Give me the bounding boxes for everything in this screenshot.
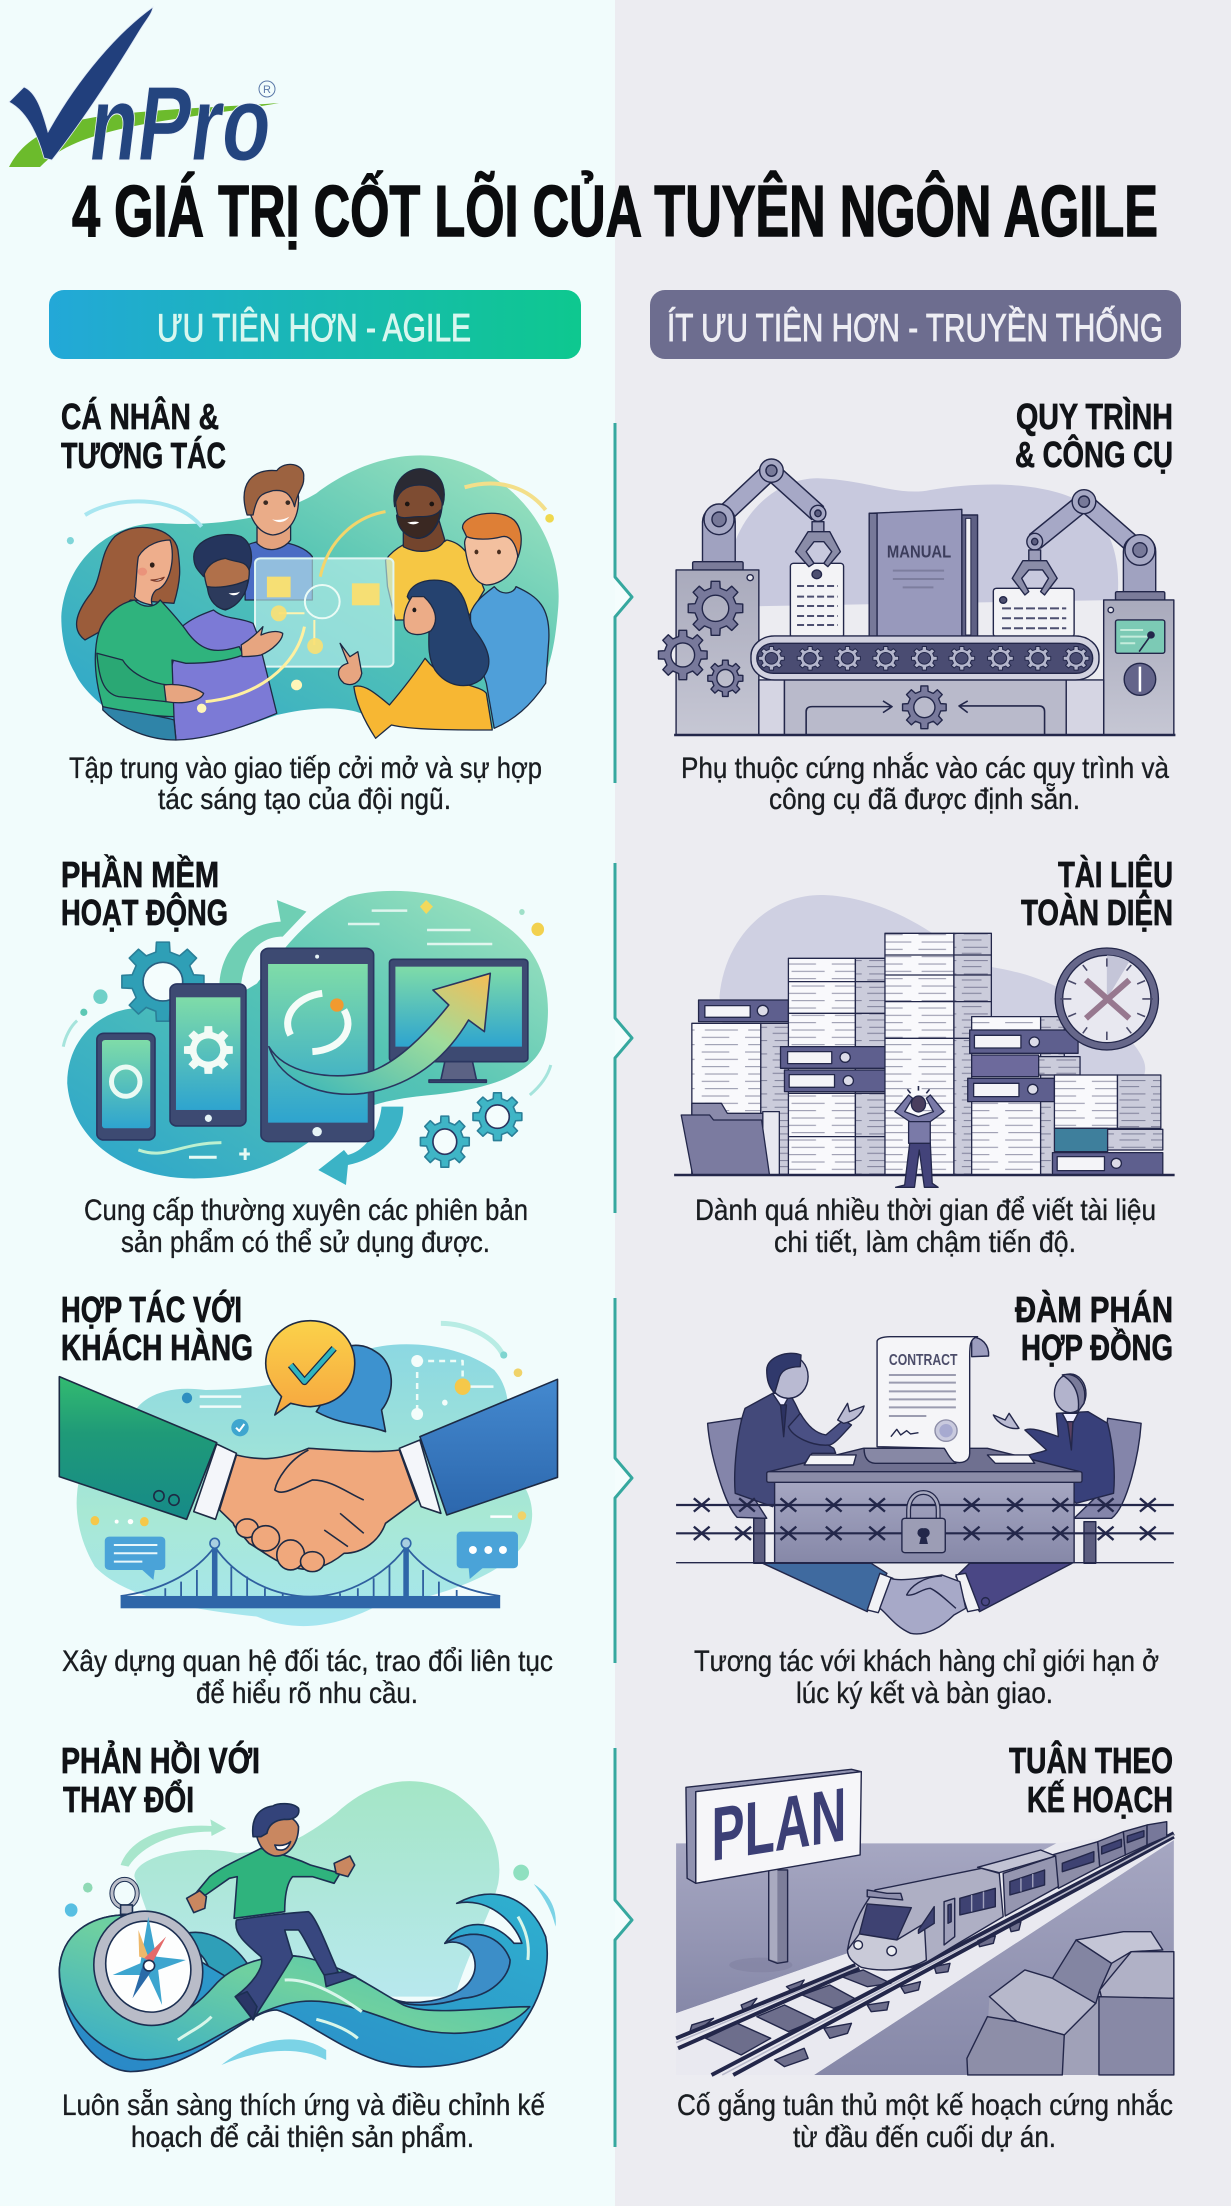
illustration: handshake over bridge xyxy=(59,1321,558,1626)
background: traditional side xyxy=(615,0,1231,2206)
header pill: agile xyxy=(49,290,581,359)
description xyxy=(681,752,1169,816)
logo: VnPro xyxy=(9,7,279,183)
description: Xây dựng quan hệ đối tác, trao đổi liên tục xyxy=(62,1645,553,1678)
heading: TƯƠNG TÁC xyxy=(61,435,226,476)
panel: comprehensive documentation xyxy=(674,853,1175,1259)
description: công cụ đã được định sẵn. xyxy=(769,783,1080,816)
heading xyxy=(61,395,226,476)
description: Cung cấp thường xuyên các phiên bản xyxy=(84,1194,528,1227)
panel: responding to change xyxy=(59,1739,556,2154)
heading xyxy=(61,1288,253,1368)
heading: HỢP ĐỒNG xyxy=(1021,1326,1173,1368)
heading xyxy=(1015,396,1173,475)
heading: HỢP TÁC VỚI xyxy=(61,1288,242,1330)
illustration: stacks of paper and clock xyxy=(674,895,1175,1187)
description xyxy=(694,1645,1159,1710)
description: Tương tác với khách hàng chỉ giới hạn ở xyxy=(694,1645,1159,1678)
panel: individuals and interactions xyxy=(61,395,559,816)
description: chi tiết, làm chậm tiến độ. xyxy=(774,1226,1076,1259)
description: hoạch để cải thiện sản phẩm. xyxy=(131,2121,474,2154)
heading: HOẠT ĐỘNG xyxy=(61,891,228,933)
illustration: runner on wave with compass xyxy=(59,1781,556,2072)
heading: CÁ NHÂN & xyxy=(61,395,219,437)
illustration: factory conveyor with manual: MANUAL xyxy=(887,542,951,562)
center divider arrows xyxy=(615,423,632,2147)
panel: customer collaboration xyxy=(59,1288,558,1710)
heading: KHÁCH HÀNG xyxy=(61,1327,253,1368)
description: Cố gắng tuân thủ một kế hoạch cứng nhắc xyxy=(677,2089,1173,2122)
logo: VnPro: nPro xyxy=(83,64,279,183)
heading: PHẦN MỀM xyxy=(61,854,219,895)
heading: KẾ HOẠCH xyxy=(1027,1779,1173,1820)
description: sản phẩm có thể sử dụng được. xyxy=(121,1226,490,1259)
panel: contract negotiation xyxy=(676,1289,1174,1710)
heading: PHẢN HỒI VỚI xyxy=(61,1739,260,1781)
description: tác sáng tạo của đội ngũ. xyxy=(158,783,451,816)
description xyxy=(84,1194,528,1259)
description xyxy=(677,2089,1173,2154)
illustration: train on rails past plan sign: PLAN xyxy=(712,1771,846,1877)
heading xyxy=(1015,1289,1173,1368)
panel: processes and tools xyxy=(658,396,1175,816)
heading: ĐÀM PHÁN xyxy=(1015,1289,1173,1330)
description xyxy=(695,1194,1156,1259)
illustration: train on rails past plan sign xyxy=(676,1769,1174,2075)
heading: QUY TRÌNH xyxy=(1016,396,1173,437)
illustration: factory conveyor with manual xyxy=(658,459,1175,735)
panel: working software xyxy=(61,854,551,1259)
heading xyxy=(1021,853,1173,933)
description xyxy=(62,1645,553,1710)
panel: following a plan xyxy=(676,1739,1174,2154)
illustration: contract table behind barbed wire xyxy=(676,1337,1174,1634)
illustration: team around a screen xyxy=(61,455,559,740)
description: Luôn sẵn sàng thích ứng và điều chỉnh kế xyxy=(62,2089,545,2122)
description: Tập trung vào giao tiếp cởi mở và sự hợp xyxy=(69,752,542,785)
heading: TUÂN THEO xyxy=(1009,1739,1173,1781)
logo: VnPro: R xyxy=(263,84,271,96)
header pill: agile: ƯU TIÊN HƠN - AGILE xyxy=(157,307,471,350)
description: Dành quá nhiều thời gian để viết tài liệu xyxy=(695,1194,1156,1227)
heading: TOÀN DIỆN xyxy=(1021,891,1173,933)
heading: & CÔNG CỤ xyxy=(1015,433,1173,475)
description: từ đầu đến cuối dự án. xyxy=(793,2121,1056,2154)
background: agile side xyxy=(0,0,615,2206)
description: Phụ thuộc cứng nhắc vào các quy trình và xyxy=(681,752,1169,785)
description: để hiểu rõ nhu cầu. xyxy=(196,1677,418,1710)
illustration: devices with upgrade arrow xyxy=(63,891,551,1185)
description xyxy=(62,2089,545,2154)
header pill: traditional xyxy=(650,290,1181,359)
heading xyxy=(61,854,228,933)
heading xyxy=(1009,1739,1173,1820)
heading xyxy=(61,1739,260,1820)
heading: THAY ĐỔI xyxy=(63,1777,194,1820)
description xyxy=(69,752,542,816)
heading: TÀI LIỆU xyxy=(1058,853,1173,895)
description: lúc ký kết và bàn giao. xyxy=(796,1677,1053,1710)
illustration: contract table behind barbed wire: CONTRACT xyxy=(889,1350,958,1369)
